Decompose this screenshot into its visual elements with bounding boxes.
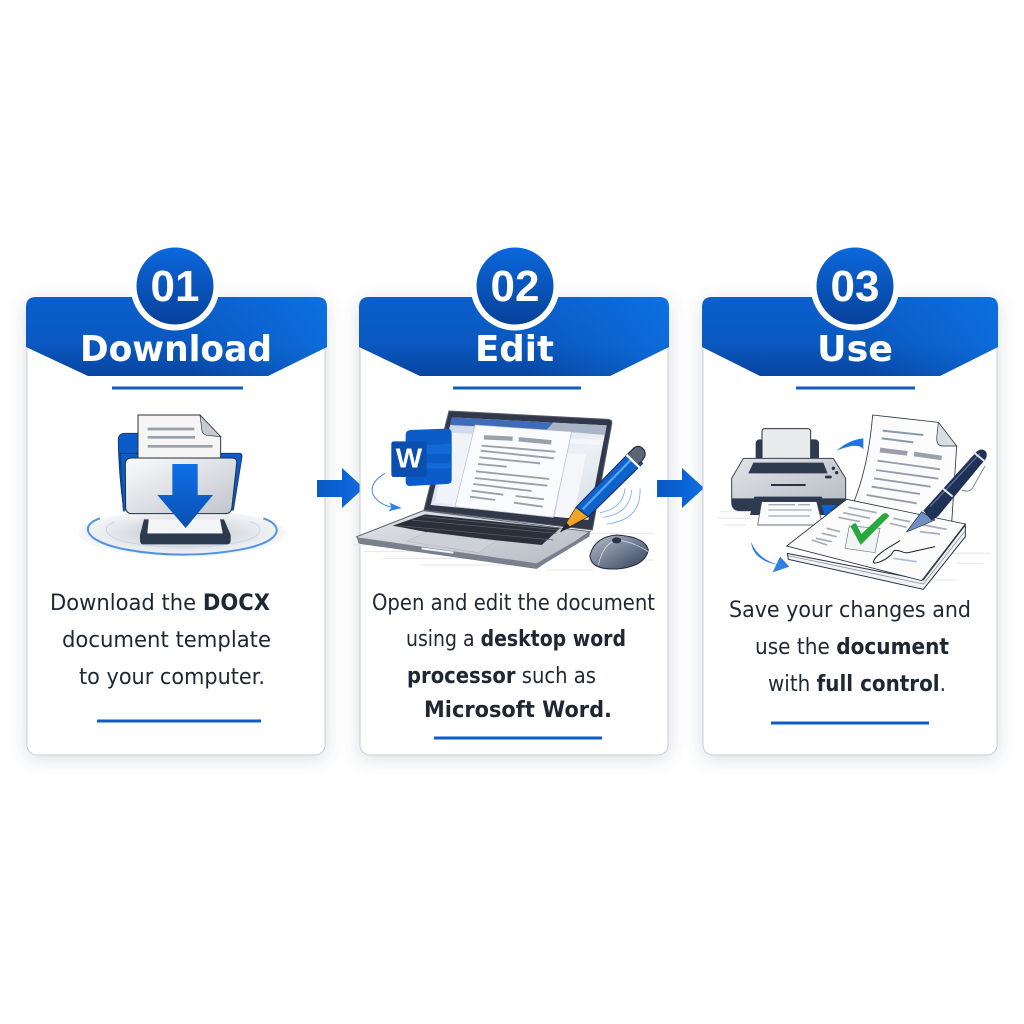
- body text: Microsoft Word.: [424, 698, 612, 723]
- body text: Download the DOCX: [50, 591, 270, 616]
- heading: Edit: Edit: [475, 329, 554, 370]
- arrow: step 1 to step 2: [317, 468, 364, 508]
- number badge 03: 03: [831, 262, 879, 311]
- heading: Download: Download: [80, 329, 272, 370]
- card 1 header band: [26, 297, 327, 376]
- bottom accent line: [771, 722, 929, 724]
- heading underline: [796, 386, 915, 390]
- panel: step 2 edit: [353, 242, 669, 755]
- body text: [50, 591, 271, 690]
- card 3 header band: [702, 297, 998, 376]
- panel: step 3 use: [702, 242, 998, 755]
- card 1 background: [27, 298, 325, 755]
- heading underline: [112, 386, 243, 390]
- heading underline: [453, 386, 581, 390]
- body text: document template: [62, 628, 271, 653]
- heading: Use: Use: [817, 329, 893, 370]
- card 3 background: [703, 298, 997, 755]
- body text: processor such as: [407, 664, 596, 689]
- body text: to your computer.: [79, 665, 265, 690]
- arrow: step 2 to step 3: [657, 468, 704, 508]
- bottom accent line: [434, 736, 602, 740]
- number badge 01: [130, 242, 220, 330]
- panel: step 1 download: [26, 242, 327, 755]
- number badge 03: [810, 242, 900, 330]
- icon: folder with download arrow: [79, 415, 286, 557]
- body text: [372, 591, 655, 723]
- number badge 02: [470, 242, 560, 330]
- card 2 background: [360, 298, 668, 755]
- icon: printer, signed document and pen: [718, 415, 990, 589]
- number badge 02: 02: [491, 262, 539, 311]
- body text: Open and edit the document: [372, 591, 655, 616]
- icon: laptop with word document and pen: [353, 411, 653, 570]
- body text: using a desktop word: [406, 627, 626, 652]
- body text: with full control.: [768, 672, 946, 697]
- number badge 01: 01: [151, 262, 199, 311]
- bottom accent line: [97, 720, 261, 722]
- icon: laptop with word document and pen: W: [396, 442, 423, 473]
- body text: Save your changes and: [729, 598, 971, 623]
- body text: [729, 598, 971, 697]
- body text: use the document: [755, 635, 949, 660]
- card 2 header band: [359, 297, 669, 376]
